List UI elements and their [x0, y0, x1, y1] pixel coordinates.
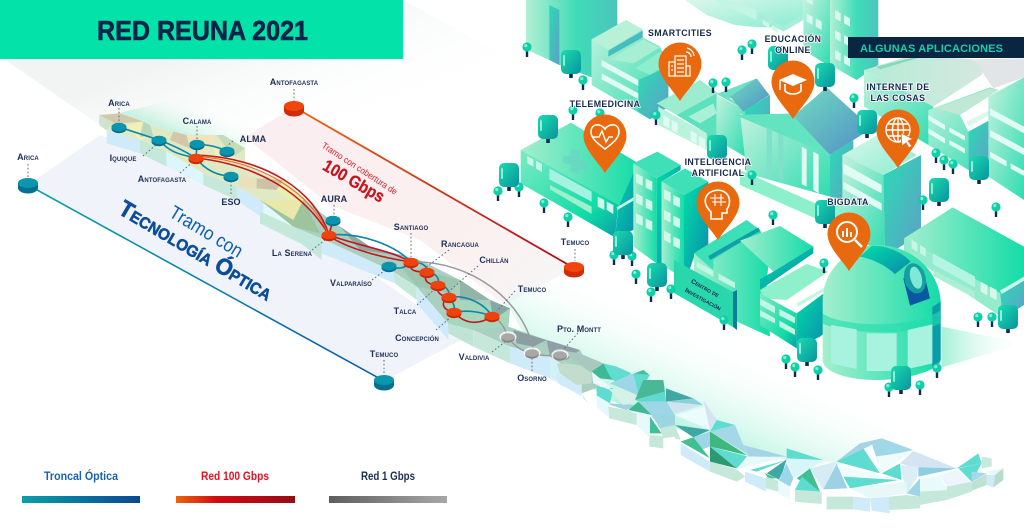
pin: Telemedicina: [584, 114, 626, 173]
ground glow below city: [505, 240, 895, 465]
network links: backbone, 100 Gbps and 1 Gbps: [119, 127, 560, 356]
map: northern Chile relief: [99, 113, 340, 260]
pin: Inteligencia artificial: [696, 182, 740, 240]
city labels on the map: Valdivia: [459, 352, 490, 362]
city labels on the map: Temuco: [518, 284, 546, 294]
pin: Bigdata: [828, 212, 870, 271]
map: central Chile relief: [260, 200, 600, 397]
city labels on the map: Calama: [183, 116, 212, 126]
city labels on the map: Iquique: [110, 153, 136, 163]
city labels on the map: Arica: [17, 152, 39, 162]
legend: Red 100 Gbps: Red 100 Gbps: [201, 471, 269, 483]
plane: 100 Gbps coverage section: [245, 107, 574, 305]
text: Tramo con Tecnología Óptica: Tecnología Óptica: [115, 194, 278, 306]
label leader lines: [28, 89, 578, 374]
plane: fibre optic backbone section: [28, 135, 465, 381]
header: Algunas aplicaciones: ALGUNAS APLICACIONES: [860, 43, 1003, 55]
trees and shrubs: [493, 39, 1018, 397]
city: back row buildings: [685, 0, 1024, 200]
sign: Centro de Investigación: Investigación: [684, 286, 723, 313]
sign: Centro de Investigación: Centro de: [689, 278, 721, 300]
city labels on the map: Osorno: [517, 373, 547, 383]
title banner: RED REUNA 2021: [97, 15, 308, 46]
application labels: SMARTCITIES: [648, 28, 712, 38]
100 Gbps coverage line: [294, 107, 574, 268]
city: temple and tall tower: [735, 87, 921, 257]
application labels: TELEMEDICINA: [570, 99, 641, 109]
city labels on the map: La Serena: [272, 248, 313, 258]
city labels on the map: Chillán: [479, 255, 509, 265]
title banner: [0, 0, 403, 59]
legend: Red 1 Gbps: Red 1 Gbps: [361, 471, 415, 483]
text: Tramo con cobertura de 100 Gbps: Tramo con cobertura de: [320, 140, 399, 197]
city labels on the map: Rancagua: [441, 239, 480, 249]
city: office towers: [633, 152, 708, 278]
city labels on the map: Antofagasta: [270, 77, 319, 87]
legend: Troncal Óptica: [22, 470, 140, 503]
city labels on the map: Temuco: [561, 237, 589, 247]
city labels on the map: Santiago: [394, 222, 428, 232]
application labels: ARTIFICIAL: [692, 168, 745, 178]
city labels on the map: Arica: [108, 98, 130, 108]
application labels: [570, 28, 930, 207]
city labels on the map: ESO: [221, 197, 241, 207]
city: right low building: [904, 207, 1024, 367]
observatory dome: [823, 245, 941, 380]
city: upper-left buildings: [526, 0, 770, 170]
city labels on the map: Concepción: [395, 333, 439, 343]
city labels on the map: ALMA: [240, 134, 267, 144]
sign: Centro de Investigación: [674, 260, 737, 330]
top grey backdrop plane: [5, 0, 640, 220]
header: Algunas aplicaciones: [848, 37, 1024, 58]
text: Tramo con cobertura de 100 Gbps: 100 Gbps: [320, 156, 388, 206]
application labels: EDUCACIÓN: [765, 33, 821, 44]
application labels: LAS COSAS: [871, 93, 925, 103]
city labels on the map: [17, 77, 601, 383]
map: southern Chile low-poly relief: [557, 350, 1003, 513]
city labels on the map: Pto. Montt: [557, 324, 601, 334]
application labels: INTERNET DE: [866, 82, 930, 92]
city: hospital: [521, 123, 638, 237]
city labels on the map: AURA: [321, 194, 348, 204]
city labels on the map: Antofagasta: [138, 174, 187, 184]
application labels: INTELIGENCIA: [685, 157, 752, 167]
application labels: ONLINE: [775, 45, 811, 55]
backbone line: [28, 185, 384, 381]
legend: Red 1 Gbps: [329, 471, 447, 503]
city labels on the map: Talca: [394, 306, 417, 316]
legend: Troncal Óptica: Troncal Óptica: [44, 470, 119, 483]
city: research centre: [694, 220, 770, 337]
network nodes: [18, 101, 584, 390]
pin: Smartcities: [658, 42, 702, 101]
pin: Internet de las cosas: [876, 110, 920, 168]
glow above northern map: [100, 95, 250, 150]
text: Tramo con Tecnología Óptica: Tramo con: [165, 202, 246, 262]
city labels on the map: Temuco: [370, 349, 398, 359]
application labels: BIGDATA: [827, 197, 869, 207]
pin: Educación Online: [772, 60, 814, 119]
legend: Red 100 Gbps: [176, 471, 295, 503]
city labels on the map: Valparaíso: [330, 278, 372, 288]
